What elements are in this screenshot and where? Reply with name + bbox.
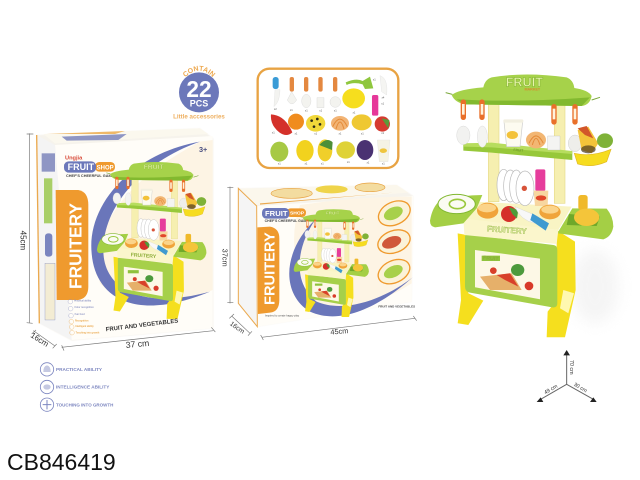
panel title: FRUITERY <box>66 203 86 289</box>
ability icons on box: Touching into growth <box>76 331 100 334</box>
quantity labels: x1 <box>272 131 275 135</box>
fruit shop logo: SHOP <box>290 210 305 216</box>
ability icons on box: Fun food <box>75 314 85 316</box>
dimension axes <box>537 350 597 402</box>
product line: FRUIT AND VEGETABLES <box>378 304 415 308</box>
toy: assembled kitchen <box>430 74 618 337</box>
product code: CB846419 <box>7 449 116 475</box>
dimension: depth: 16cm <box>29 331 51 349</box>
dimension: height: 45cm <box>18 231 27 251</box>
utensils row <box>273 76 387 116</box>
toy photo: FRUIT <box>144 164 164 171</box>
brand: Ungjia <box>65 155 83 161</box>
quantity labels: x1 <box>381 102 385 106</box>
badge unit: PCS <box>190 98 208 108</box>
fruit shop logo: SHOP <box>97 165 114 171</box>
ability icons on box: Intelligent ability <box>75 325 94 328</box>
box faces <box>238 183 413 327</box>
quantity labels: x1 <box>278 161 281 165</box>
blue swoosh <box>289 220 413 316</box>
toy body <box>430 74 613 337</box>
quantity labels: x1 <box>347 160 350 164</box>
box faces <box>37 128 213 341</box>
axis arrowheads <box>537 350 597 402</box>
ability icons on box <box>68 299 100 335</box>
box: fruitery tall <box>18 128 215 351</box>
counter label: FRUITERY <box>487 224 528 236</box>
ability: growth: TOUCHING INTO GROWTH <box>56 402 113 407</box>
badge number: 22 <box>186 76 212 102</box>
panel title: FRUITERY <box>263 232 279 305</box>
dimension lines <box>27 133 215 351</box>
quantity labels: x1 <box>373 77 376 81</box>
quantity labels: x1 <box>381 131 385 135</box>
badge: contain 22 pcs <box>173 66 225 120</box>
dimension: depth: 16cm <box>228 321 246 336</box>
badge circle <box>179 72 219 112</box>
quantity labels: x2 <box>274 107 277 111</box>
quantity labels: x4 <box>382 96 385 100</box>
fruit shop logo: FRUIT <box>265 209 288 218</box>
side panel art <box>42 153 55 320</box>
canopy title: FRUIT <box>506 76 543 90</box>
quantity labels: x1 <box>382 161 385 165</box>
axis: height: 70 cm <box>568 360 574 375</box>
quantity labels <box>272 77 385 165</box>
ability icons on box: Practical ability <box>74 300 92 303</box>
panel: accessories <box>258 69 398 168</box>
axis: depth: 49 cm <box>543 383 559 396</box>
quantity labels: x1 <box>367 161 370 165</box>
fruit shop logo: FRUIT <box>68 162 95 172</box>
door label: FRUIT <box>483 255 500 263</box>
quantity labels: x1 <box>319 108 323 112</box>
blue swoosh <box>91 142 210 306</box>
tagline: CHEF'S CHEERFUL GAME <box>265 219 309 223</box>
ability: practical: PRACTICAL ABILITY <box>56 367 103 372</box>
dimension lines <box>227 187 417 340</box>
quantity labels: x1 <box>314 132 318 136</box>
fruit shop logo <box>64 161 115 173</box>
toy shadow <box>572 250 618 323</box>
ability icons on box: Recognition <box>75 319 89 322</box>
age mark: 3+ <box>199 145 207 154</box>
fruit shop logo <box>262 208 306 219</box>
shelf label: FRUIT <box>513 148 523 153</box>
box: fruitery wide <box>221 183 417 340</box>
fruit row 2 <box>270 139 390 162</box>
badge arc label: CONTAIN <box>183 66 216 77</box>
toy photo <box>294 209 369 317</box>
toy photo: FRUIT <box>326 210 340 215</box>
dimension: width: 45cm <box>330 326 349 337</box>
quantity labels: x1 <box>321 161 324 165</box>
badge caption: Little accessories <box>173 113 225 120</box>
axis: width: 30 cm <box>572 382 588 395</box>
tagline: CHEF'S CHEERFUL GAME <box>66 174 115 178</box>
legend: ability list <box>40 363 113 411</box>
small print: Inspired to create happy play <box>265 314 300 318</box>
quantity labels: x1 <box>305 108 308 112</box>
quantity labels: x1 <box>334 108 337 112</box>
three feature vignettes <box>374 196 414 289</box>
fruit row 1 <box>271 114 390 135</box>
quantity labels: x1 <box>305 161 308 165</box>
toy photo <box>97 162 206 319</box>
panel frame <box>258 69 398 168</box>
quantity labels: x1 <box>295 131 298 135</box>
toy photo: FRUITERY <box>130 252 157 260</box>
quantity labels: x1 <box>361 131 364 135</box>
quantity labels: x1 <box>290 108 293 112</box>
product line: FRUIT AND VEGETABLES <box>106 318 179 333</box>
axis lines <box>541 354 593 399</box>
ability: intelligence: INTELLIGENCE ABILITY <box>56 385 110 390</box>
quantity labels: x1 <box>353 110 356 114</box>
orange panel <box>56 190 88 300</box>
dimension: width: 37 cm <box>125 338 150 350</box>
canopy subtitle: MARKET <box>525 88 541 92</box>
ability icons on box: Color recognition <box>74 306 94 309</box>
quantity labels: x1 <box>339 131 342 135</box>
dimension: height: 37cm <box>221 249 230 267</box>
orange panel <box>257 227 279 314</box>
